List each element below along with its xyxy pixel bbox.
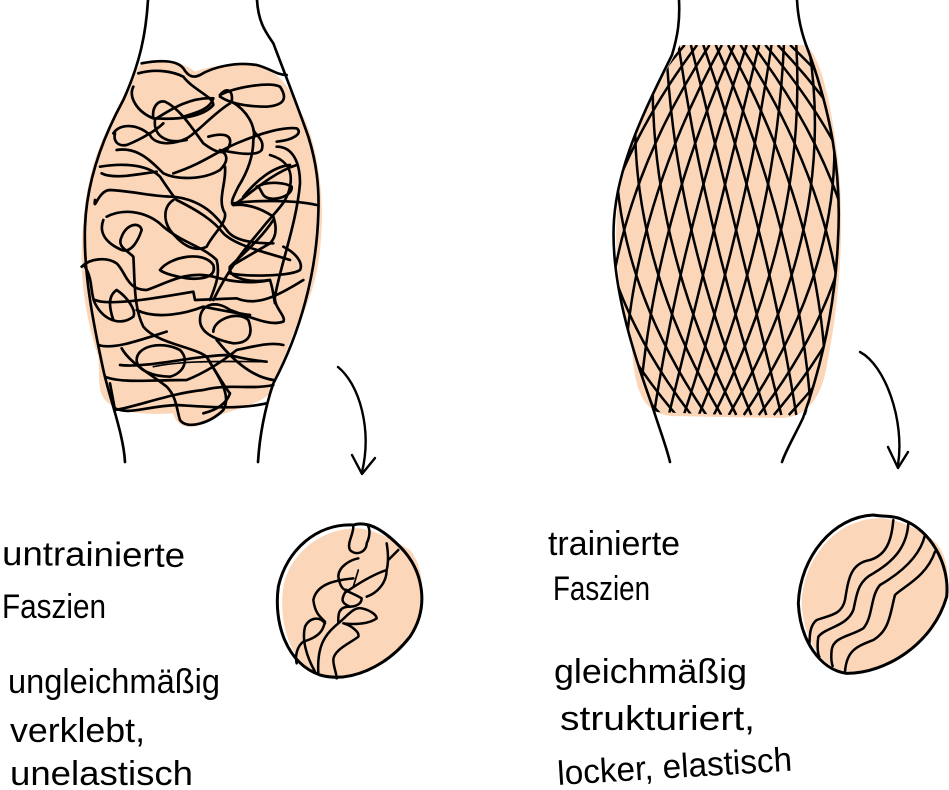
fascia net (616, 45, 838, 416)
muscle outline left (85, 0, 319, 462)
text block: trainierte Faszien: Faszien (553, 570, 650, 608)
panel: untrained fascia muscle (82, 0, 322, 462)
text block: untrainierte Faszien: Faszien (2, 588, 106, 626)
text block: trainierte Faszien: trainierte (548, 525, 680, 563)
panel: trained fascia muscle (612, 0, 842, 464)
detail circle: ordered wavy fibres (798, 515, 948, 673)
text block: right description: gleichmäßig (554, 653, 747, 691)
text block: left description: ungleichmäßig (8, 663, 220, 701)
text block: trainierte Faszien (548, 525, 680, 608)
muscle outline right (614, 0, 839, 462)
text block: untrainierte Faszien (2, 535, 185, 626)
text block: untrainierte Faszien: untrainierte (2, 535, 185, 575)
text block: right description: strukturiert, (560, 700, 755, 738)
text block: left description (8, 663, 220, 790)
peach muscle blob right (616, 45, 841, 418)
tangled fascia lines (82, 61, 317, 425)
text block: right description (554, 653, 793, 790)
arrow left (338, 367, 375, 474)
arrow right (860, 352, 908, 468)
peach muscle blob left (82, 60, 322, 427)
text block: left description: verklebt, (10, 712, 145, 750)
detail circle: tangled fibres (277, 524, 422, 678)
